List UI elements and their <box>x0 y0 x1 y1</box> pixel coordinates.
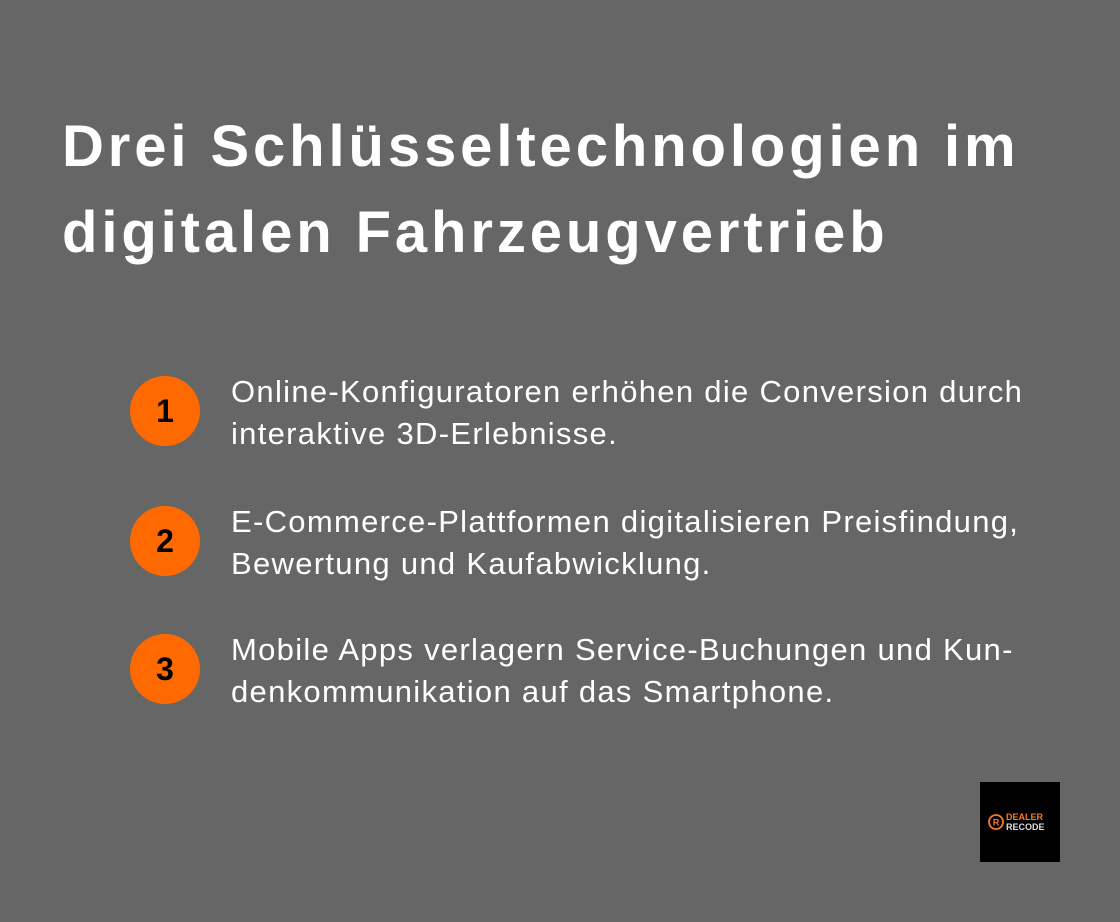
item 1 <box>130 374 1023 451</box>
icon: number 3 <box>130 634 200 704</box>
icon: number 1 <box>130 376 200 446</box>
logo: RECODE <box>1006 822 1045 832</box>
logo: R <box>993 818 1000 828</box>
text 1: interaktive 3D-Erlebnisse. <box>231 416 618 451</box>
icon: number 3: 3 <box>156 651 174 687</box>
icon: number 1: 1 <box>156 393 174 429</box>
icon: number 2: 2 <box>156 523 174 559</box>
text 2: E-Commerce-Plattformen digitalisieren Preisfindung, <box>231 504 1019 539</box>
text 1: Online-Konfiguratoren erhöhen die Conversion durch <box>231 374 1023 409</box>
title: Drei Schlüsseltechnologien im <box>62 114 1020 179</box>
icon: number 2 <box>130 506 200 576</box>
item 2 <box>130 504 1019 581</box>
logo <box>980 782 1060 862</box>
title <box>62 114 1020 265</box>
text 3: denkommunikation auf das Smartphone. <box>231 674 834 709</box>
text 3: Mobile Apps verlagern Service-Buchungen und Kun- <box>231 632 1014 667</box>
text 1 <box>231 374 1023 451</box>
item 3 <box>130 632 1014 709</box>
text 3 <box>231 632 1014 709</box>
text 2 <box>231 504 1019 581</box>
logo: DEALER <box>1006 812 1044 822</box>
title: digitalen Fahrzeugvertrieb <box>62 200 889 265</box>
text 2: Bewertung und Kaufabwicklung. <box>231 546 712 581</box>
